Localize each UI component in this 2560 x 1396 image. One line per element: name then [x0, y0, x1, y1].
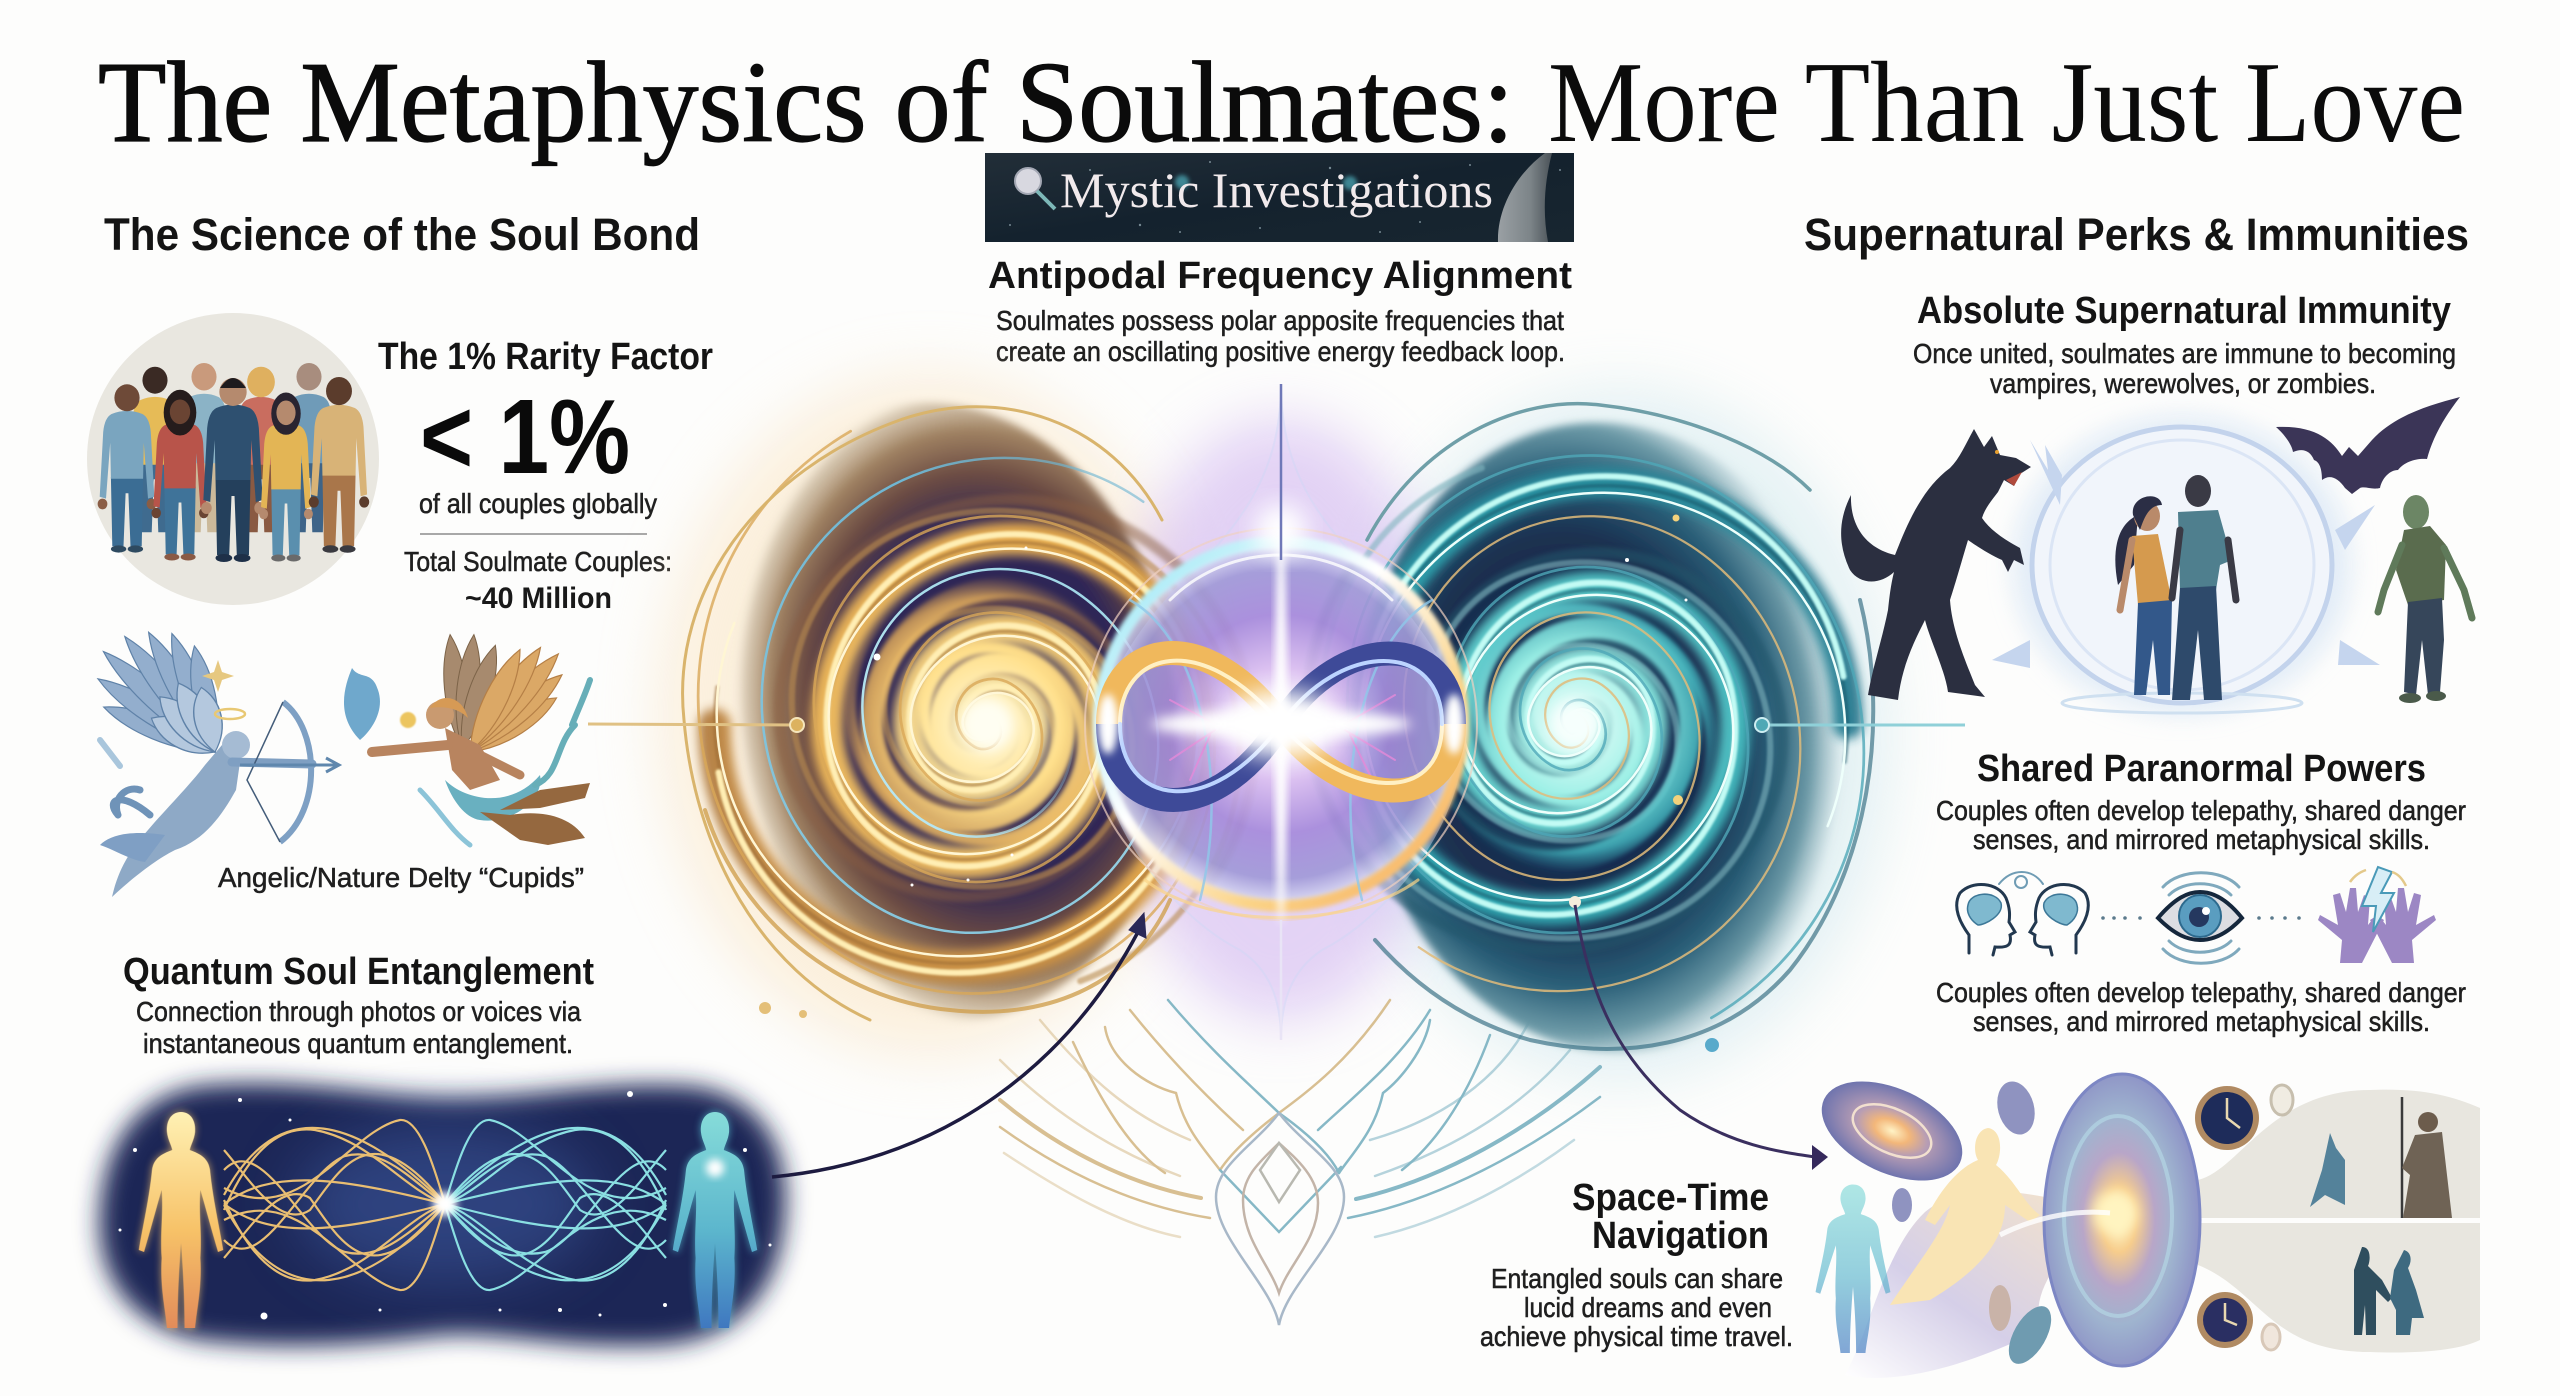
heading: space-time navigation — [1480, 1177, 1793, 1352]
heading: absolute supernatural immunity: vampires, werewolves, or zombies. — [1990, 368, 2376, 399]
connector: teal line to immunity — [1755, 718, 1965, 732]
icon: separators — [2101, 916, 2301, 920]
heading: space-time navigation: Navigation — [1592, 1215, 1769, 1257]
panel: quantum entanglement illustration — [99, 1083, 786, 1346]
chart background: central glow halos — [660, 375, 1890, 1080]
icon: angel with bow — [92, 627, 339, 897]
text block: rarity factor: Total Soulmate Couples: — [404, 546, 672, 577]
heading: quantum soul entanglement: Quantum Soul Entanglement — [123, 951, 594, 993]
heading: absolute supernatural immunity: Absolute Supernatural Immunity — [1917, 290, 2451, 332]
panel: rarity factor group illustration — [87, 313, 379, 605]
heading: space-time navigation: achieve physical time travel. — [1480, 1321, 1793, 1352]
heading: absolute supernatural immunity — [1913, 290, 2456, 399]
decorative fan lines and leaf ornament — [1000, 1000, 1600, 1325]
illustration: protective shield — [1992, 415, 2380, 715]
central orb with infinity symbol — [1085, 384, 1477, 1040]
heading: shared paranormal powers: Couples often develop telepathy, shared danger — [1936, 795, 2466, 826]
text block: shared powers repeated — [1936, 977, 2466, 1037]
arrow: entanglement to orb — [772, 913, 1146, 1177]
title — [98, 39, 2465, 167]
heading: quantum soul entanglement: instantaneous quantum entanglement. — [143, 1028, 573, 1059]
illustration: zombie — [2378, 495, 2472, 703]
heading: shared paranormal powers: Shared Paranormal Powers — [1977, 748, 2426, 790]
heading: science of the soul bond: The Science of the Soul Bond — [104, 209, 700, 260]
heading: antipodal frequency alignment: Soulmates possess polar apposite frequencies that — [996, 305, 1564, 336]
arrow: spiral to space-time — [1569, 896, 1828, 1170]
icon: seeing eye — [2158, 873, 2242, 963]
text block: rarity factor — [378, 336, 713, 615]
connector: gold line to cupids — [588, 718, 804, 732]
diagram: gold spiral frequency — [586, 363, 1349, 1082]
logo banner: mystic investigations: Mystic Investigations — [1060, 162, 1493, 218]
icon: telepathy heads — [1957, 872, 2088, 955]
text block: rarity factor: The 1% Rarity Factor — [378, 336, 713, 378]
icon: hands with lightning — [2318, 867, 2436, 963]
diagram: teal spiral frequency — [1213, 367, 1976, 1086]
heading: quantum soul entanglement — [123, 951, 594, 1059]
caption: cupids: Angelic/Nature Delty “Cupids” — [218, 862, 584, 893]
heading: antipodal frequency alignment: create an oscillating positive energy feedback loop. — [996, 336, 1565, 367]
heading: space-time navigation: Space-Time — [1572, 1177, 1769, 1219]
heading: quantum soul entanglement: Connection through photos or voices via — [136, 996, 581, 1027]
text block: rarity factor: < 1% — [420, 378, 630, 496]
heading: space-time navigation: lucid dreams and even — [1524, 1292, 1772, 1323]
heading: antipodal frequency alignment — [988, 255, 1572, 367]
illustration: couple — [2115, 475, 2236, 700]
heading: shared paranormal powers: senses, and mirrored metaphysical skills. — [1973, 824, 2430, 855]
text block: shared powers repeated: Couples often develop telepathy, shared danger — [1936, 977, 2466, 1008]
logo banner: mystic investigations — [985, 153, 1574, 242]
text block: rarity factor: of all couples globally — [419, 488, 657, 519]
icon: nature deity cupid — [344, 633, 590, 845]
illustration: space-time wormhole — [1806, 1061, 2480, 1378]
heading: supernatural perks: Supernatural Perks & Immunities — [1804, 209, 2469, 260]
heading: absolute supernatural immunity: Once united, soulmates are immune to becoming — [1913, 338, 2456, 369]
text block: rarity factor: ~40 Million — [465, 582, 612, 615]
title: More Than Just Love — [1548, 39, 2465, 167]
heading: shared paranormal powers — [1936, 748, 2466, 855]
illustration: werewolf — [1841, 429, 2031, 700]
title: The Metaphysics of Soulmates: — [98, 39, 1514, 167]
illustration: bat — [2276, 397, 2460, 494]
text block: shared powers repeated: senses, and mirrored metaphysical skills. — [1973, 1006, 2430, 1037]
heading: antipodal frequency alignment: Antipodal Frequency Alignment — [988, 255, 1572, 297]
heading: space-time navigation: Entangled souls can share — [1491, 1263, 1783, 1294]
